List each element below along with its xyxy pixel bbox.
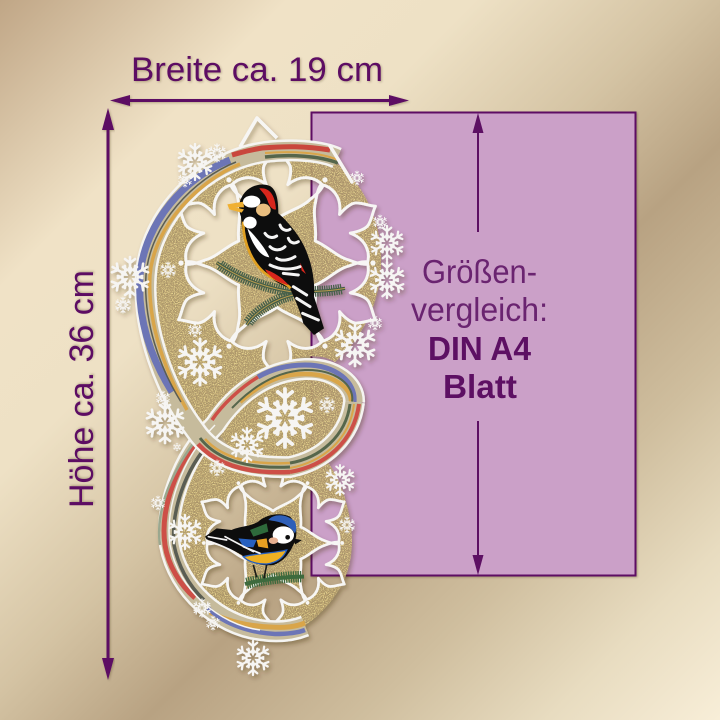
heading: width label: Breite ca. 19 cm [131, 51, 383, 89]
flower outline: upper [156, 149, 398, 377]
icon: blue tit [205, 514, 302, 565]
text block: A4 comparison label [411, 253, 548, 405]
label line: Blatt: Blatt [443, 368, 517, 405]
arrow: A4 height upper [472, 113, 484, 232]
gold mesh: middle oval [220, 380, 343, 456]
gold mesh body [150, 152, 381, 632]
panel: DIN A4 sheet [312, 112, 636, 576]
gold mesh: lower disc [172, 445, 352, 632]
icon: pine branch lower [245, 565, 304, 584]
arrow: height [102, 108, 114, 680]
ornament: ribbon tip [330, 146, 352, 182]
ribbon: upper strand [140, 147, 359, 472]
bead dots: upper flower [153, 134, 401, 392]
bead dots: lower flower [183, 450, 363, 636]
label line: DIN A4: DIN A4 [428, 330, 532, 367]
ornament: top triangle loop [240, 118, 277, 147]
flower outline: lower [185, 461, 361, 625]
label line: Größen-: Größen- [422, 253, 537, 290]
lace doily: embroidered window picture [109, 118, 406, 675]
snowflakes [109, 144, 406, 675]
icon: great spotted woodpecker [227, 184, 324, 335]
heading: height label: Höhe ca. 36 cm [63, 270, 101, 508]
label line: vergleich: vergleich: [411, 291, 548, 328]
icon: pine branch upper [217, 263, 345, 325]
ribbon: lower strand [159, 365, 354, 634]
arrow: width [110, 95, 409, 106]
gold mesh: upper disc [150, 152, 381, 430]
arrow: A4 height lower [472, 421, 484, 575]
